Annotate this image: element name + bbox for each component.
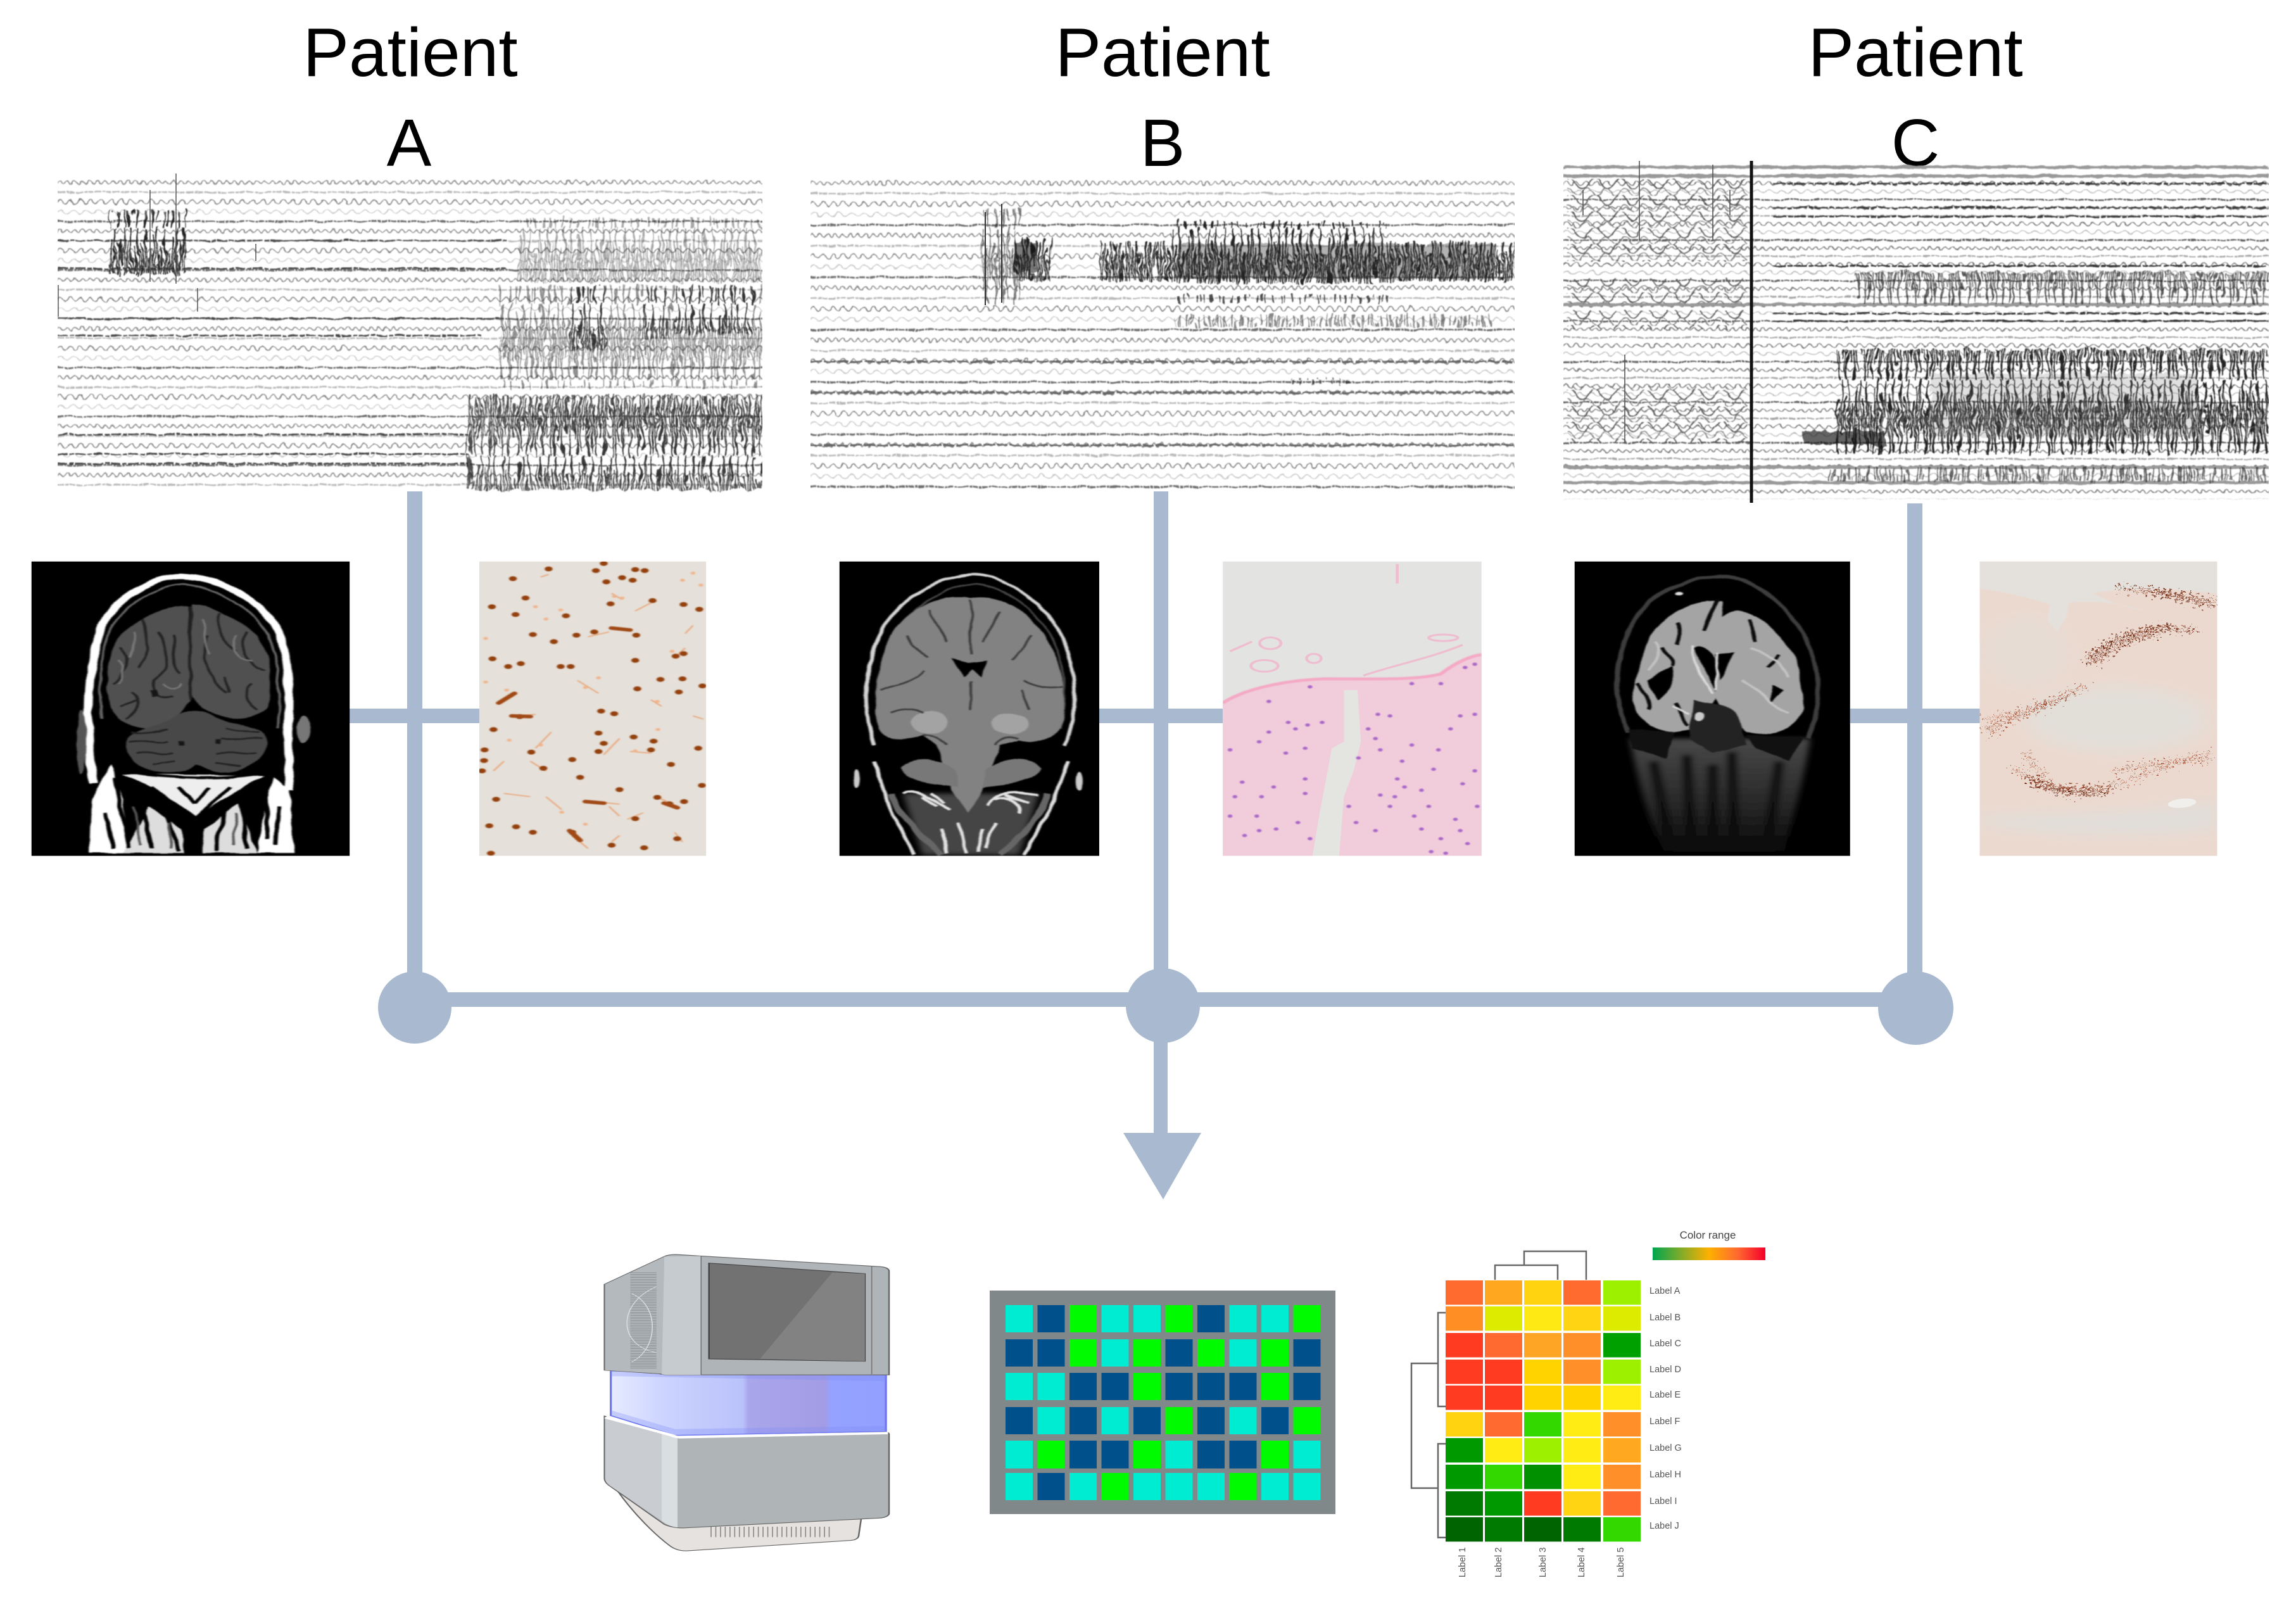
brain tissue (1223, 655, 1482, 856)
heading: Patient C: C (1891, 106, 1940, 180)
left dendrogram (1411, 1313, 1446, 1538)
connector: patient A branch (350, 709, 479, 723)
column labels: Label 5 (1616, 1547, 1626, 1577)
brain (1632, 601, 1722, 732)
connector: patient A stem (407, 491, 422, 985)
cerebellum (126, 710, 267, 773)
connector: patient C branch (1850, 709, 1980, 723)
connector: patient B branch (1099, 709, 1223, 723)
column labels (1458, 1547, 1626, 1577)
EEG trace: patient B (804, 178, 1523, 488)
lower housing (605, 1416, 889, 1528)
instrument: sequencer illustration (605, 1254, 889, 1551)
row labels: Label B (1649, 1313, 1681, 1323)
column labels: Label 4 (1577, 1547, 1587, 1577)
row labels: Label J (1649, 1521, 1679, 1531)
heading: Patient A: Patient (303, 14, 518, 91)
ventricles and sulci (1694, 646, 1715, 691)
heading: Patient A (303, 14, 518, 180)
row labels: Label I (1649, 1496, 1677, 1506)
row labels: Label G (1649, 1443, 1682, 1453)
column labels: Label 1 (1458, 1547, 1468, 1577)
cerebellum (900, 759, 959, 787)
histology: patient C (1979, 562, 2217, 856)
row labels: Label C (1649, 1339, 1681, 1349)
MRI: patient C (1575, 562, 1850, 856)
histology: patient B (1223, 562, 1482, 856)
neck tissue (1630, 738, 1810, 853)
MRI: patient A (32, 562, 350, 856)
heading: Patient A: A (387, 106, 432, 180)
connector: patient B stem (1154, 491, 1168, 985)
sulci (113, 606, 265, 766)
heatmap with dendrograms (1411, 1229, 1765, 1577)
glowing blue chamber (611, 1371, 886, 1436)
ears (77, 710, 86, 774)
skull base (1689, 700, 1746, 753)
stained cell bands (1983, 588, 2214, 793)
tissue crack (1313, 690, 1361, 856)
neck tissue (91, 764, 129, 853)
row labels: Label D (1649, 1365, 1681, 1375)
EEG trace: patient A (51, 174, 769, 489)
display screen (709, 1263, 865, 1361)
heading: Patient B (1055, 14, 1270, 180)
row labels (1649, 1286, 1682, 1531)
EEG trace: patient C (1558, 161, 2276, 503)
color range legend: Color range (1680, 1229, 1736, 1241)
heatmap cells (1446, 1280, 1641, 1541)
row labels: Label E (1649, 1390, 1681, 1400)
node: patient C (1878, 971, 1953, 1045)
background glass (1979, 562, 2217, 632)
skull outline (88, 576, 290, 790)
temporal lobes (911, 710, 948, 734)
nuclei (1230, 664, 1477, 853)
row labels: Label H (1649, 1470, 1681, 1480)
vessels (1230, 564, 1463, 676)
plate: colored well grid (990, 1291, 1335, 1514)
arrow: down to analysis (1123, 1039, 1201, 1199)
heading: Patient B: Patient (1055, 14, 1270, 91)
MRI: patient B (840, 562, 1099, 856)
heading: Patient C: Patient (1808, 14, 2023, 91)
skull outline (866, 575, 1075, 745)
column labels: Label 3 (1538, 1547, 1548, 1577)
tissue core (2026, 687, 2207, 752)
row labels: Label F (1649, 1417, 1681, 1427)
column labels: Label 2 (1494, 1547, 1504, 1577)
heading: Patient C (1808, 14, 2023, 180)
connector: main horizontal line (443, 992, 1887, 1007)
histology: patient A (479, 562, 706, 856)
connector lines (350, 491, 1980, 1199)
neck (875, 761, 1068, 855)
instrument base (617, 1490, 861, 1551)
node: patient A (378, 971, 451, 1044)
connector: patient C stem (1907, 503, 1922, 985)
node: patient B (1126, 968, 1200, 1043)
brain (876, 597, 1064, 813)
color range legend (1653, 1229, 1765, 1260)
ventricles (952, 659, 988, 677)
heading: Patient B: B (1140, 106, 1185, 180)
sulci (881, 600, 1063, 745)
top dendrogram (1495, 1251, 1586, 1280)
skull outline (1618, 576, 1818, 738)
upper housing (605, 1254, 889, 1375)
row labels: Label A (1649, 1286, 1681, 1296)
cerebrum (107, 606, 190, 729)
